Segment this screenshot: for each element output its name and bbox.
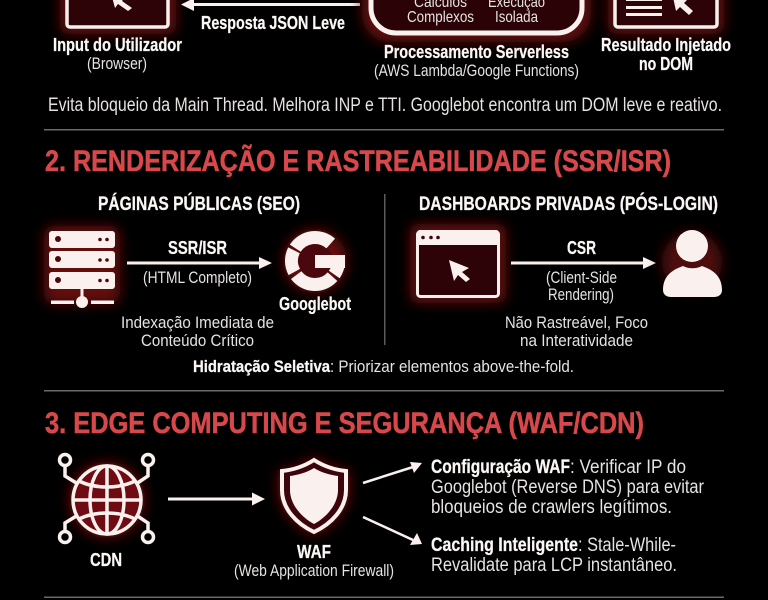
text: selective hydration: : Priorizar elementos above-the-fold. (330, 357, 574, 376)
icon: user (662, 230, 722, 297)
arrow: WAF to caching (363, 517, 422, 545)
label: client-side rendering: Rendering) (548, 285, 614, 304)
label: JSON response: Resposta JSON Leve (201, 13, 345, 33)
label: WAF: (Web Application Firewall) (234, 561, 394, 580)
arrow: JSON response (181, 0, 360, 11)
arrow: WAF to configuration (363, 462, 422, 483)
text: smart caching: Caching Inteligente (431, 535, 578, 556)
text: selective hydration: Hidratação Seletiva (193, 357, 330, 376)
text: not crawlable (505, 313, 648, 350)
text: WAF configuration: : Verificar IP do (570, 457, 686, 478)
text: immediate indexing: Conteúdo Crítico (141, 331, 254, 350)
label: user input: (Browser) (87, 54, 147, 73)
label: WAF: WAF (297, 542, 331, 562)
text: immediate indexing (121, 313, 274, 350)
text: selective hydration (193, 357, 574, 376)
arrow: browser to user (511, 257, 656, 269)
subheading: public pages: PÁGINAS PÚBLICAS (SEO) (98, 193, 300, 215)
icon: serverless box: Isolada (495, 9, 538, 26)
label: client-side rendering: (Client-Side (546, 268, 617, 287)
heading: section 2: 2. RENDERIZAÇÃO E RASTREABILIDADE (SSR/ISR) (45, 144, 671, 178)
icon: CDN globe (60, 454, 154, 542)
text: smart caching: : Stale-While- (578, 535, 676, 556)
icon: Google G (283, 229, 347, 293)
icon: browser window (410, 224, 506, 303)
icon: serverless box: Complexos (407, 9, 474, 26)
label: SSR/ISR: SSR/ISR (168, 238, 227, 258)
arrow: server to Googlebot (127, 257, 272, 269)
panel: private dashboards (410, 193, 722, 350)
text: WAF configuration: Googlebot (Reverse DNS) para evitar (431, 477, 705, 498)
text: immediate indexing: Indexação Imediata de (121, 313, 274, 332)
text: not crawlable: Não Rastreável, Foco (505, 313, 648, 332)
icon: WAF shield (278, 456, 350, 536)
label: complete HTML: (HTML Completo) (143, 268, 252, 287)
panel: section 1 serverless flow (48, 0, 731, 116)
icon: server (44, 226, 120, 308)
panel: edge computing and security (60, 454, 705, 580)
label: DOM result (601, 35, 731, 74)
label: CDN: CDN (90, 550, 122, 570)
text: WAF configuration (431, 457, 705, 518)
text: WAF configuration: bloqueios de crawlers legítimos. (431, 497, 672, 518)
label: serverless processing: (AWS Lambda/Google Functions) (374, 61, 579, 80)
text: smart caching: Revalidate para LCP instantâneo. (431, 555, 677, 576)
label: DOM result: Resultado Injetado (601, 35, 731, 55)
heading: section 3: 3. EDGE COMPUTING E SEGURANÇA (WAF/CDN) (45, 407, 644, 440)
label: user input (53, 35, 182, 73)
arrow: CDN to WAF (168, 492, 265, 506)
label: serverless processing (374, 42, 579, 80)
text: not crawlable: na Interatividade (520, 331, 633, 350)
text: WAF configuration: Configuração WAF (431, 457, 570, 478)
label: serverless processing: Processamento Serverless (384, 42, 569, 62)
label: DOM result: no DOM (639, 54, 693, 74)
icon: DOM result (608, 0, 724, 34)
label: CSR: CSR (567, 238, 596, 258)
label: client-side rendering (546, 268, 617, 304)
icon: browser input (60, 0, 176, 34)
label: user input: Input do Utilizador (53, 35, 182, 55)
text: smart caching (431, 535, 677, 576)
label: Googlebot: Googlebot (279, 294, 351, 314)
icon: serverless box (362, 0, 591, 42)
label: WAF (234, 542, 394, 580)
panel: public pages (44, 193, 351, 350)
